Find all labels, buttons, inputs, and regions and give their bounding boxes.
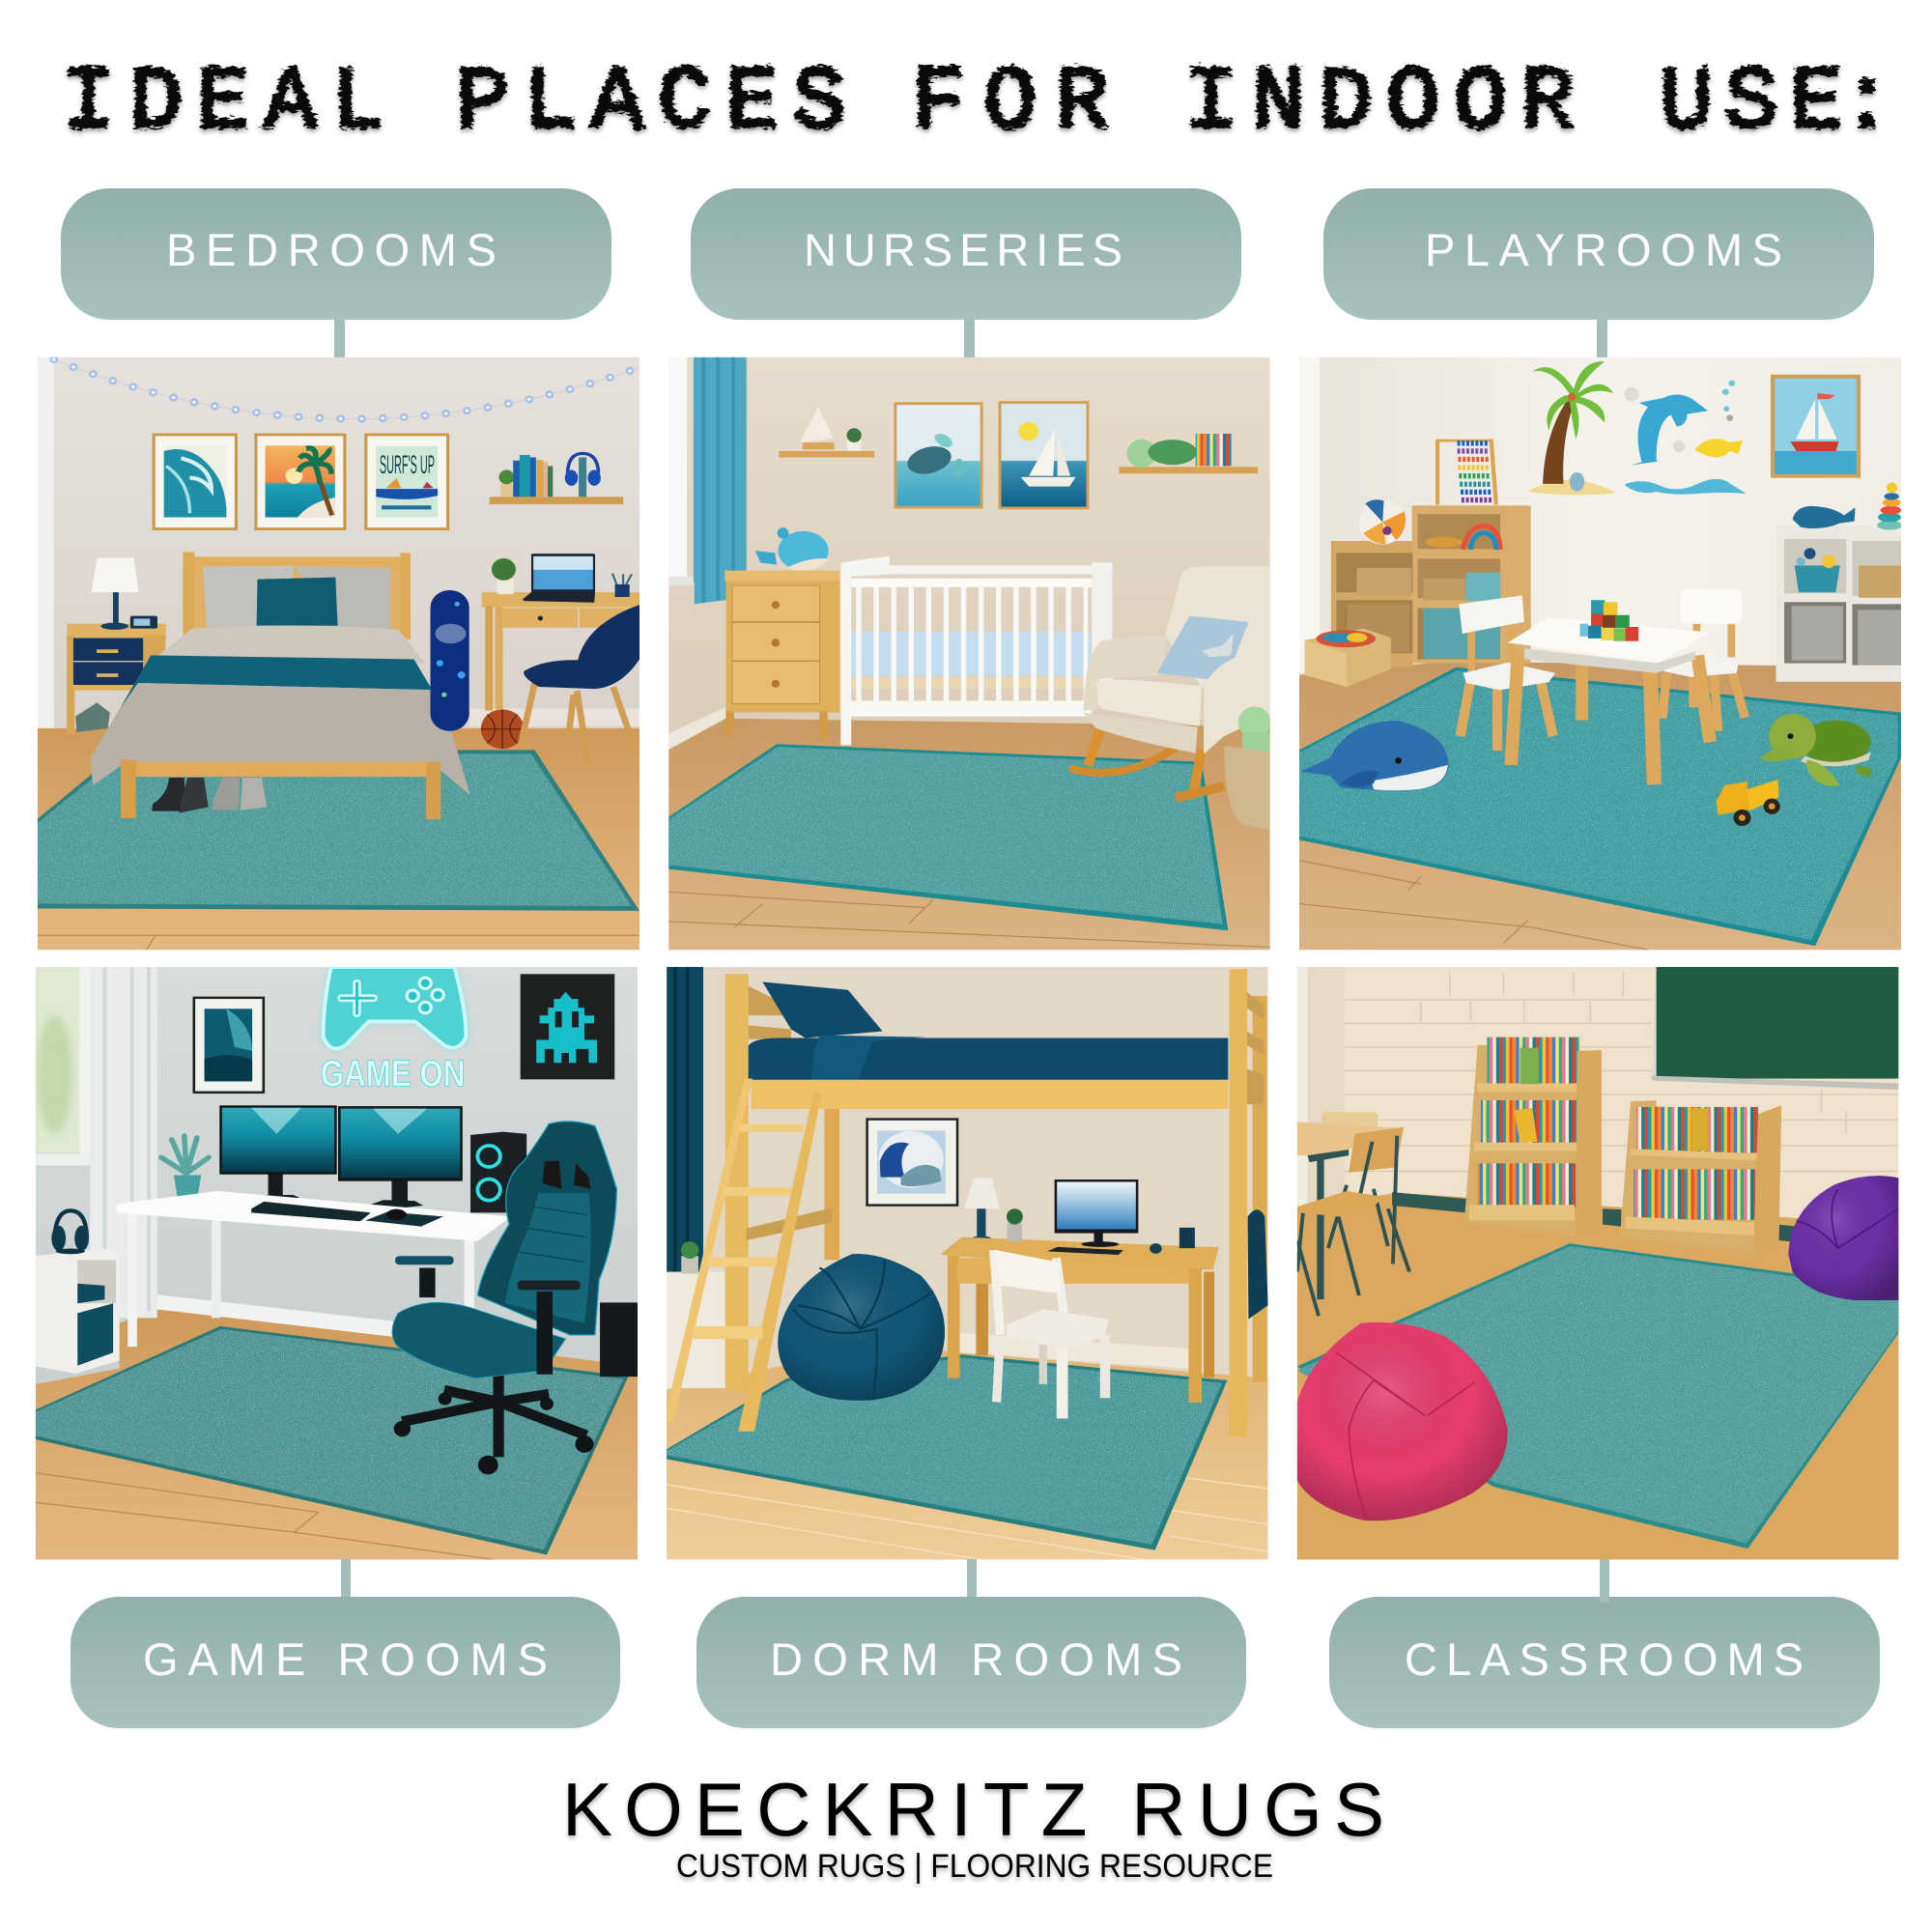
- framed wave art: [153, 434, 238, 530]
- rug: [36, 1326, 629, 1555]
- framed surf poster: [364, 434, 449, 530]
- loft bed frame: [725, 969, 1267, 1436]
- panel: bedroom scene: [38, 357, 639, 950]
- hanging towel: [1248, 1209, 1268, 1320]
- navy chair: [521, 605, 639, 766]
- label pill: classrooms: [1329, 1559, 1880, 1728]
- curtain: [694, 357, 747, 604]
- label pill: classrooms: CLASSROOMS: [1405, 1634, 1804, 1685]
- box under desk: [600, 1302, 638, 1377]
- crate of colourful balls: [1305, 629, 1391, 687]
- panel: dorm room scene: [667, 967, 1268, 1560]
- framed sunset art: [254, 434, 346, 530]
- neon game on text: GAME ON: [321, 1052, 465, 1094]
- framed turtle art: [894, 402, 983, 509]
- whale plush on rug: [1300, 721, 1449, 790]
- sneakers under bed: [152, 778, 267, 813]
- loft ladder: [667, 1079, 821, 1432]
- framed space art: [193, 997, 265, 1094]
- beach ball: [1359, 499, 1406, 545]
- desk with monitor: [941, 1179, 1219, 1403]
- panel: game room scene: [36, 967, 638, 1560]
- framed pixel invader art: [521, 974, 614, 1079]
- label pill: playrooms: [1323, 188, 1874, 358]
- woven basket with teddy bear: [1224, 706, 1271, 830]
- table and chairs: [1297, 1112, 1409, 1316]
- label pill: game rooms: [71, 1559, 620, 1728]
- panel: bedroom scene: SURF'S UP: [380, 449, 435, 479]
- neon game controller sign: [323, 967, 468, 1048]
- table lamp: [964, 1178, 1000, 1241]
- toy dump truck: [1717, 780, 1780, 826]
- label pill: dorm rooms: [696, 1559, 1246, 1728]
- title: IDEAL: [62, 52, 399, 154]
- potted plant: [161, 1136, 209, 1196]
- rocking chair: [1069, 567, 1270, 798]
- wall shelf with books and headphones: [490, 453, 623, 504]
- panel: playroom scene: [1299, 357, 1902, 950]
- short bookcase: [1620, 1100, 1781, 1253]
- rug: [668, 744, 1228, 930]
- back chair: [1662, 589, 1745, 731]
- fish wall decal: [1694, 439, 1743, 457]
- white chair: [992, 1250, 1110, 1418]
- dresser with whale plush: [724, 527, 839, 741]
- navy curtain: [667, 967, 703, 1272]
- label pill: playrooms: PLAYROOMS: [1425, 224, 1782, 275]
- pc tower: [470, 1132, 526, 1212]
- rug: [38, 750, 639, 911]
- framed wave art: [866, 1118, 958, 1207]
- front chair: [1459, 595, 1555, 751]
- label pill: bedrooms: BEDROOMS: [166, 224, 497, 275]
- blue beanbag: [778, 1254, 945, 1401]
- panel: classroom scene: [1297, 967, 1898, 1560]
- title: :: [1840, 52, 1908, 154]
- white play table with blocks: [1508, 600, 1711, 784]
- dolphin wall decal: [1624, 380, 1735, 466]
- white cubby with toys: [1776, 526, 1901, 682]
- framed sailboat art: [1771, 375, 1861, 478]
- left shelf with sailboat and plant: [779, 407, 874, 457]
- nightstand with lamp: [67, 558, 166, 735]
- white drawer unit with plant: [667, 1241, 725, 1388]
- string lights: [54, 359, 639, 419]
- white desk: [117, 1191, 511, 1347]
- framed sailboat art: [999, 401, 1089, 509]
- right shelf with turtle plush and books: [1120, 434, 1258, 473]
- rug: [667, 1354, 1228, 1550]
- label pill: nurseries: NURSERIES: [804, 224, 1122, 275]
- label pill: game rooms: GAME ROOMS: [143, 1634, 548, 1685]
- label pill: nurseries: [691, 188, 1241, 358]
- white crib: [840, 556, 1112, 745]
- basketball: [481, 709, 524, 749]
- label pill: dorm rooms: DORM ROOMS: [770, 1634, 1182, 1685]
- title: PLACES: [456, 52, 860, 154]
- skateboard: [431, 590, 469, 731]
- green chalkboard: [1651, 967, 1898, 1090]
- tall bookcase: [1464, 1037, 1602, 1236]
- gaming chair: [392, 1122, 616, 1474]
- curtain: [90, 967, 157, 1318]
- label pill: bedrooms: [61, 188, 611, 358]
- dual monitors: [219, 1105, 463, 1208]
- turtle plush on rug: [1759, 714, 1871, 786]
- stacking ring toy: [1877, 483, 1902, 530]
- brand tagline: CUSTOM RUGS | FLOORING RESOURCE: [676, 1848, 1273, 1885]
- desk with laptop: [482, 554, 639, 711]
- wave wall decal: [1626, 479, 1747, 495]
- brand name: KOECKRITZ RUGS: [562, 1767, 1384, 1852]
- title: USE: [1660, 52, 1855, 154]
- panel: nursery scene: [668, 357, 1271, 950]
- bed: [91, 552, 470, 819]
- wooden toy shelf: [1331, 505, 1531, 668]
- rug: [1297, 1243, 1898, 1548]
- title: INDOOR: [1184, 52, 1588, 154]
- abacus: [1436, 440, 1496, 504]
- palm tree wall decal: [1527, 361, 1616, 495]
- title: FOR: [912, 52, 1127, 154]
- blue whale toy on cubby: [1793, 506, 1856, 528]
- rug: [1299, 668, 1901, 946]
- white side cabinet with headphones: [36, 1210, 120, 1374]
- purple beanbag: [1788, 1176, 1898, 1300]
- pink beanbag: [1297, 1322, 1508, 1520]
